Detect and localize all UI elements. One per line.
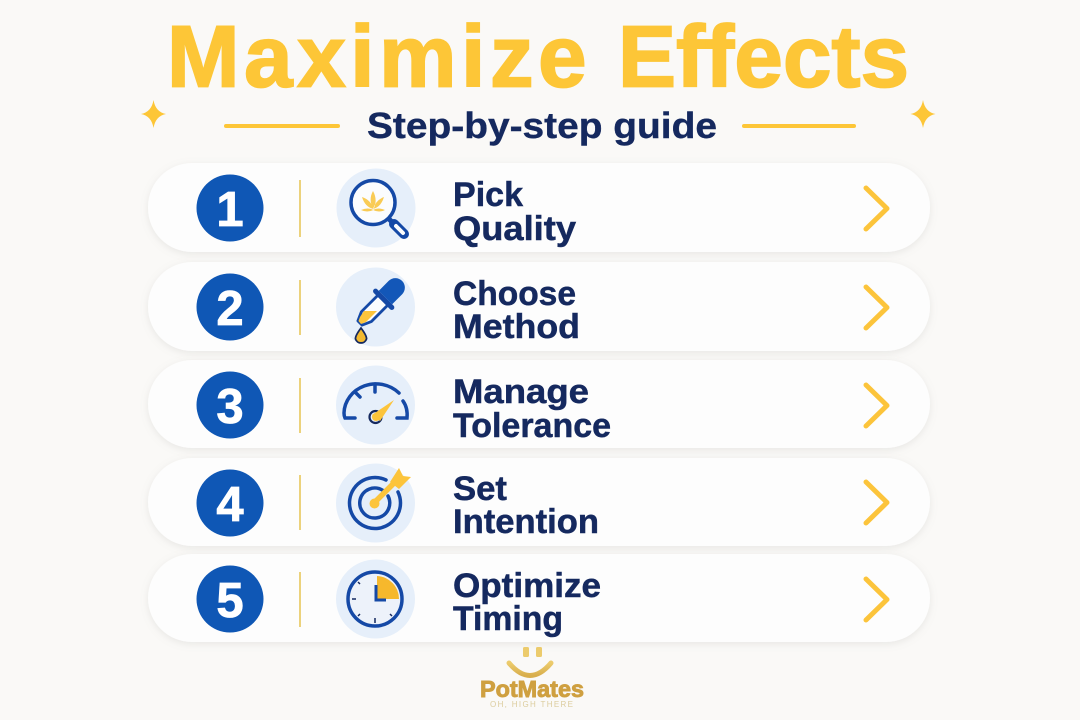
arrow (866, 579, 887, 620)
number badge 4: 4 (216, 478, 244, 532)
step label (453, 567, 601, 638)
title (167, 8, 910, 106)
logo: PotMates (480, 647, 584, 709)
step label: Optimize (453, 567, 601, 605)
card (148, 262, 930, 351)
step label: Quality (453, 210, 576, 248)
number badge 1: 1 (216, 183, 244, 237)
step label (453, 176, 576, 248)
subtitle: Step-by-step guide (367, 105, 717, 146)
step label: Choose (453, 275, 576, 313)
card (148, 554, 930, 642)
number badge 5: 5 (216, 574, 244, 628)
divider (299, 180, 301, 237)
title: Maximize (167, 8, 588, 106)
icon: smile (509, 647, 551, 676)
tagline: OH, HIGH THERE (490, 700, 573, 709)
step label (453, 373, 611, 445)
step label (453, 470, 599, 541)
number badge 5 (196, 566, 264, 632)
icon: magnifier with leaf (336, 168, 416, 248)
arrow (866, 188, 887, 229)
panel: step 5 (148, 554, 930, 642)
step label: Tolerance (453, 407, 611, 445)
brand name: PotMates (480, 676, 584, 702)
icon: left sparkle (141, 100, 166, 128)
step label: Set (453, 470, 507, 508)
number badge 2: 2 (216, 282, 244, 336)
number badge 2 (196, 274, 264, 340)
panel: step 1 (148, 163, 930, 252)
left subtitle rule (224, 124, 340, 128)
number badge 1 (196, 174, 264, 242)
icon: gauge (336, 366, 415, 444)
card (148, 458, 930, 546)
icon: target with dart (336, 464, 415, 542)
step label: Pick (453, 176, 523, 214)
arrow (866, 482, 887, 523)
card (148, 163, 930, 252)
divider (299, 378, 301, 433)
icon: right sparkle (910, 100, 936, 128)
icon: clock (336, 560, 415, 638)
card (148, 360, 930, 448)
number badge 4 (196, 470, 264, 536)
arrow (866, 287, 887, 328)
number badge 3: 3 (216, 380, 244, 434)
panel: step 4 (148, 458, 930, 546)
panel: step 3 (148, 360, 930, 448)
number badge 3 (196, 372, 264, 438)
step label: Manage (453, 373, 589, 411)
step label (453, 275, 580, 346)
right subtitle rule (742, 124, 856, 128)
arrow (866, 385, 887, 426)
title: Effects (618, 8, 910, 106)
step label: Timing (453, 600, 563, 638)
divider (299, 475, 301, 530)
step label: Intention (453, 503, 599, 541)
step label: Method (453, 308, 580, 346)
divider (299, 280, 301, 335)
panel: step 2 (148, 262, 930, 351)
icon: dropper (336, 268, 415, 346)
divider (299, 572, 301, 627)
